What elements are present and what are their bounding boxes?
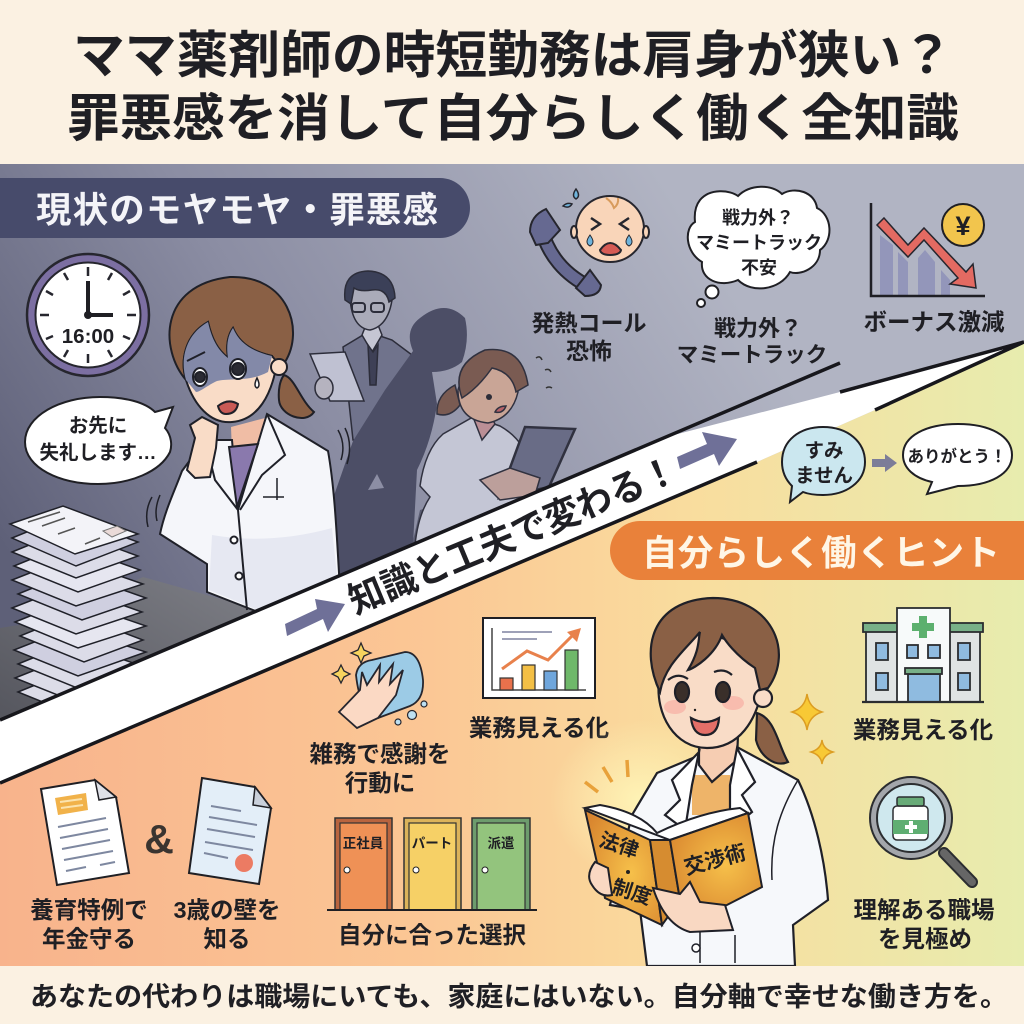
speech bubble: sorry: すみ <box>804 440 844 462</box>
title: ママ薬剤師の時短勤務は肩身が狭い？ <box>73 27 953 84</box>
label: understanding workplace <box>854 897 994 952</box>
illustration: open book: 法律 <box>596 828 641 863</box>
panel: current worries background <box>0 164 1024 764</box>
illustration: colleague with tablet <box>412 349 575 545</box>
label: understanding workplace: 理解ある職場 <box>854 897 994 923</box>
title <box>67 27 959 147</box>
icon: hand wiping <box>332 643 427 728</box>
label: fever call fear: 発熱コール <box>532 310 646 336</box>
label: visualise work: 業務見える化 <box>469 715 609 741</box>
icon: documents <box>41 780 129 885</box>
label: thanks with chores <box>310 741 450 796</box>
speech bubble: leaving first <box>25 397 173 484</box>
label: three-year wall <box>173 897 281 952</box>
footer message: あなたの代わりは職場にいても、家庭にはいない。自分軸で幸せな働き方を。 <box>30 982 1008 1012</box>
speech bubble: thanks: ありがとう！ <box>908 446 1006 466</box>
icon: phone <box>530 209 601 296</box>
label: pension: 養育特例で <box>30 897 148 923</box>
speech bubble: sorry: ません <box>795 465 853 487</box>
title: 罪悪感を消して自分らしく働く全知識 <box>67 90 959 147</box>
chart: bonus drop <box>871 203 985 296</box>
speech bubble: thanks <box>903 424 1012 494</box>
icon: wall clock <box>27 254 149 376</box>
label: mommy track <box>677 316 827 367</box>
illustration: open book <box>585 805 762 932</box>
icon: sparkles <box>792 694 833 764</box>
label: thanks with chores: 雑務で感謝を <box>310 741 450 767</box>
arrow: band left <box>285 599 345 636</box>
thought bubble: mommy track: マミートラック <box>696 233 822 253</box>
speech bubble: leaving first: お先に <box>69 415 127 437</box>
band text: change with knowledge: 知識と工夫で変わる！ <box>343 449 684 622</box>
icon: three doors: 派遣 <box>488 835 515 851</box>
label: pension <box>30 897 148 952</box>
chart: visualise work <box>483 618 595 698</box>
icon: three doors <box>327 818 537 910</box>
heading: current worries <box>0 178 470 238</box>
label: fever call fear <box>532 310 646 364</box>
icon: certificate <box>189 778 271 884</box>
illustration: open book: 制度 <box>609 875 654 910</box>
speech bubble: sorry <box>782 427 865 502</box>
icon: crying baby <box>563 189 649 262</box>
icon: three doors: パート <box>412 836 452 851</box>
label: thanks with chores: 行動に <box>345 770 415 796</box>
panel: header background <box>0 0 1024 164</box>
icon: magnifier <box>870 777 972 882</box>
thought bubble: mommy track: 戦力外？ <box>722 207 794 228</box>
speech bubble: leaving first: 失礼します… <box>39 442 157 464</box>
label: three-year wall: 知る <box>204 926 250 952</box>
illustration: happy pharmacist with book <box>610 598 828 966</box>
glow behind book <box>550 720 730 880</box>
thought bubble: mommy track: 不安 <box>741 258 777 278</box>
label: pension: 年金守る <box>42 926 136 952</box>
label: mommy track: マミートラック <box>677 343 827 367</box>
panel: tips background <box>0 342 1024 966</box>
illustration: worried pharmacist <box>147 277 350 612</box>
label: fever call fear: 恐怖 <box>566 338 612 364</box>
background: desk <box>0 577 300 760</box>
heading: tips: 自分らしく働くヒント <box>642 533 1000 573</box>
icon: hospital <box>862 608 984 702</box>
panel: footer background <box>0 966 1024 1024</box>
chart: bonus drop: ¥ <box>955 211 971 241</box>
label: visualise work 2: 業務見える化 <box>853 717 993 743</box>
label: bonus drop: ボーナス激減 <box>864 309 1005 335</box>
illustration: colleague with glasses <box>310 271 412 440</box>
ampersand: & <box>144 816 174 862</box>
label: mommy track: 戦力外？ <box>714 316 802 341</box>
arrow: band right <box>677 432 737 469</box>
illustration: open book: 交渉術 <box>681 840 749 880</box>
label: three-year wall: 3歳の壁を <box>173 897 281 923</box>
heading: tips <box>610 521 1024 580</box>
icon: three doors: 正社員 <box>343 835 384 851</box>
illustration: paper stack <box>10 506 146 718</box>
illustration: silhouette of colleague <box>330 308 467 600</box>
label: suitable choice: 自分に合った選択 <box>338 922 526 948</box>
icon: wall clock: 16:00 <box>62 325 114 348</box>
heading: current worries: 現状のモヤモヤ・罪悪感 <box>36 190 438 230</box>
arrow: sorry to thanks <box>872 454 897 472</box>
diagonal white band <box>0 342 1024 783</box>
thought bubble: mommy track <box>688 187 829 307</box>
icon: book glow rays <box>585 760 628 792</box>
label: understanding workplace: を見極め <box>878 926 972 952</box>
